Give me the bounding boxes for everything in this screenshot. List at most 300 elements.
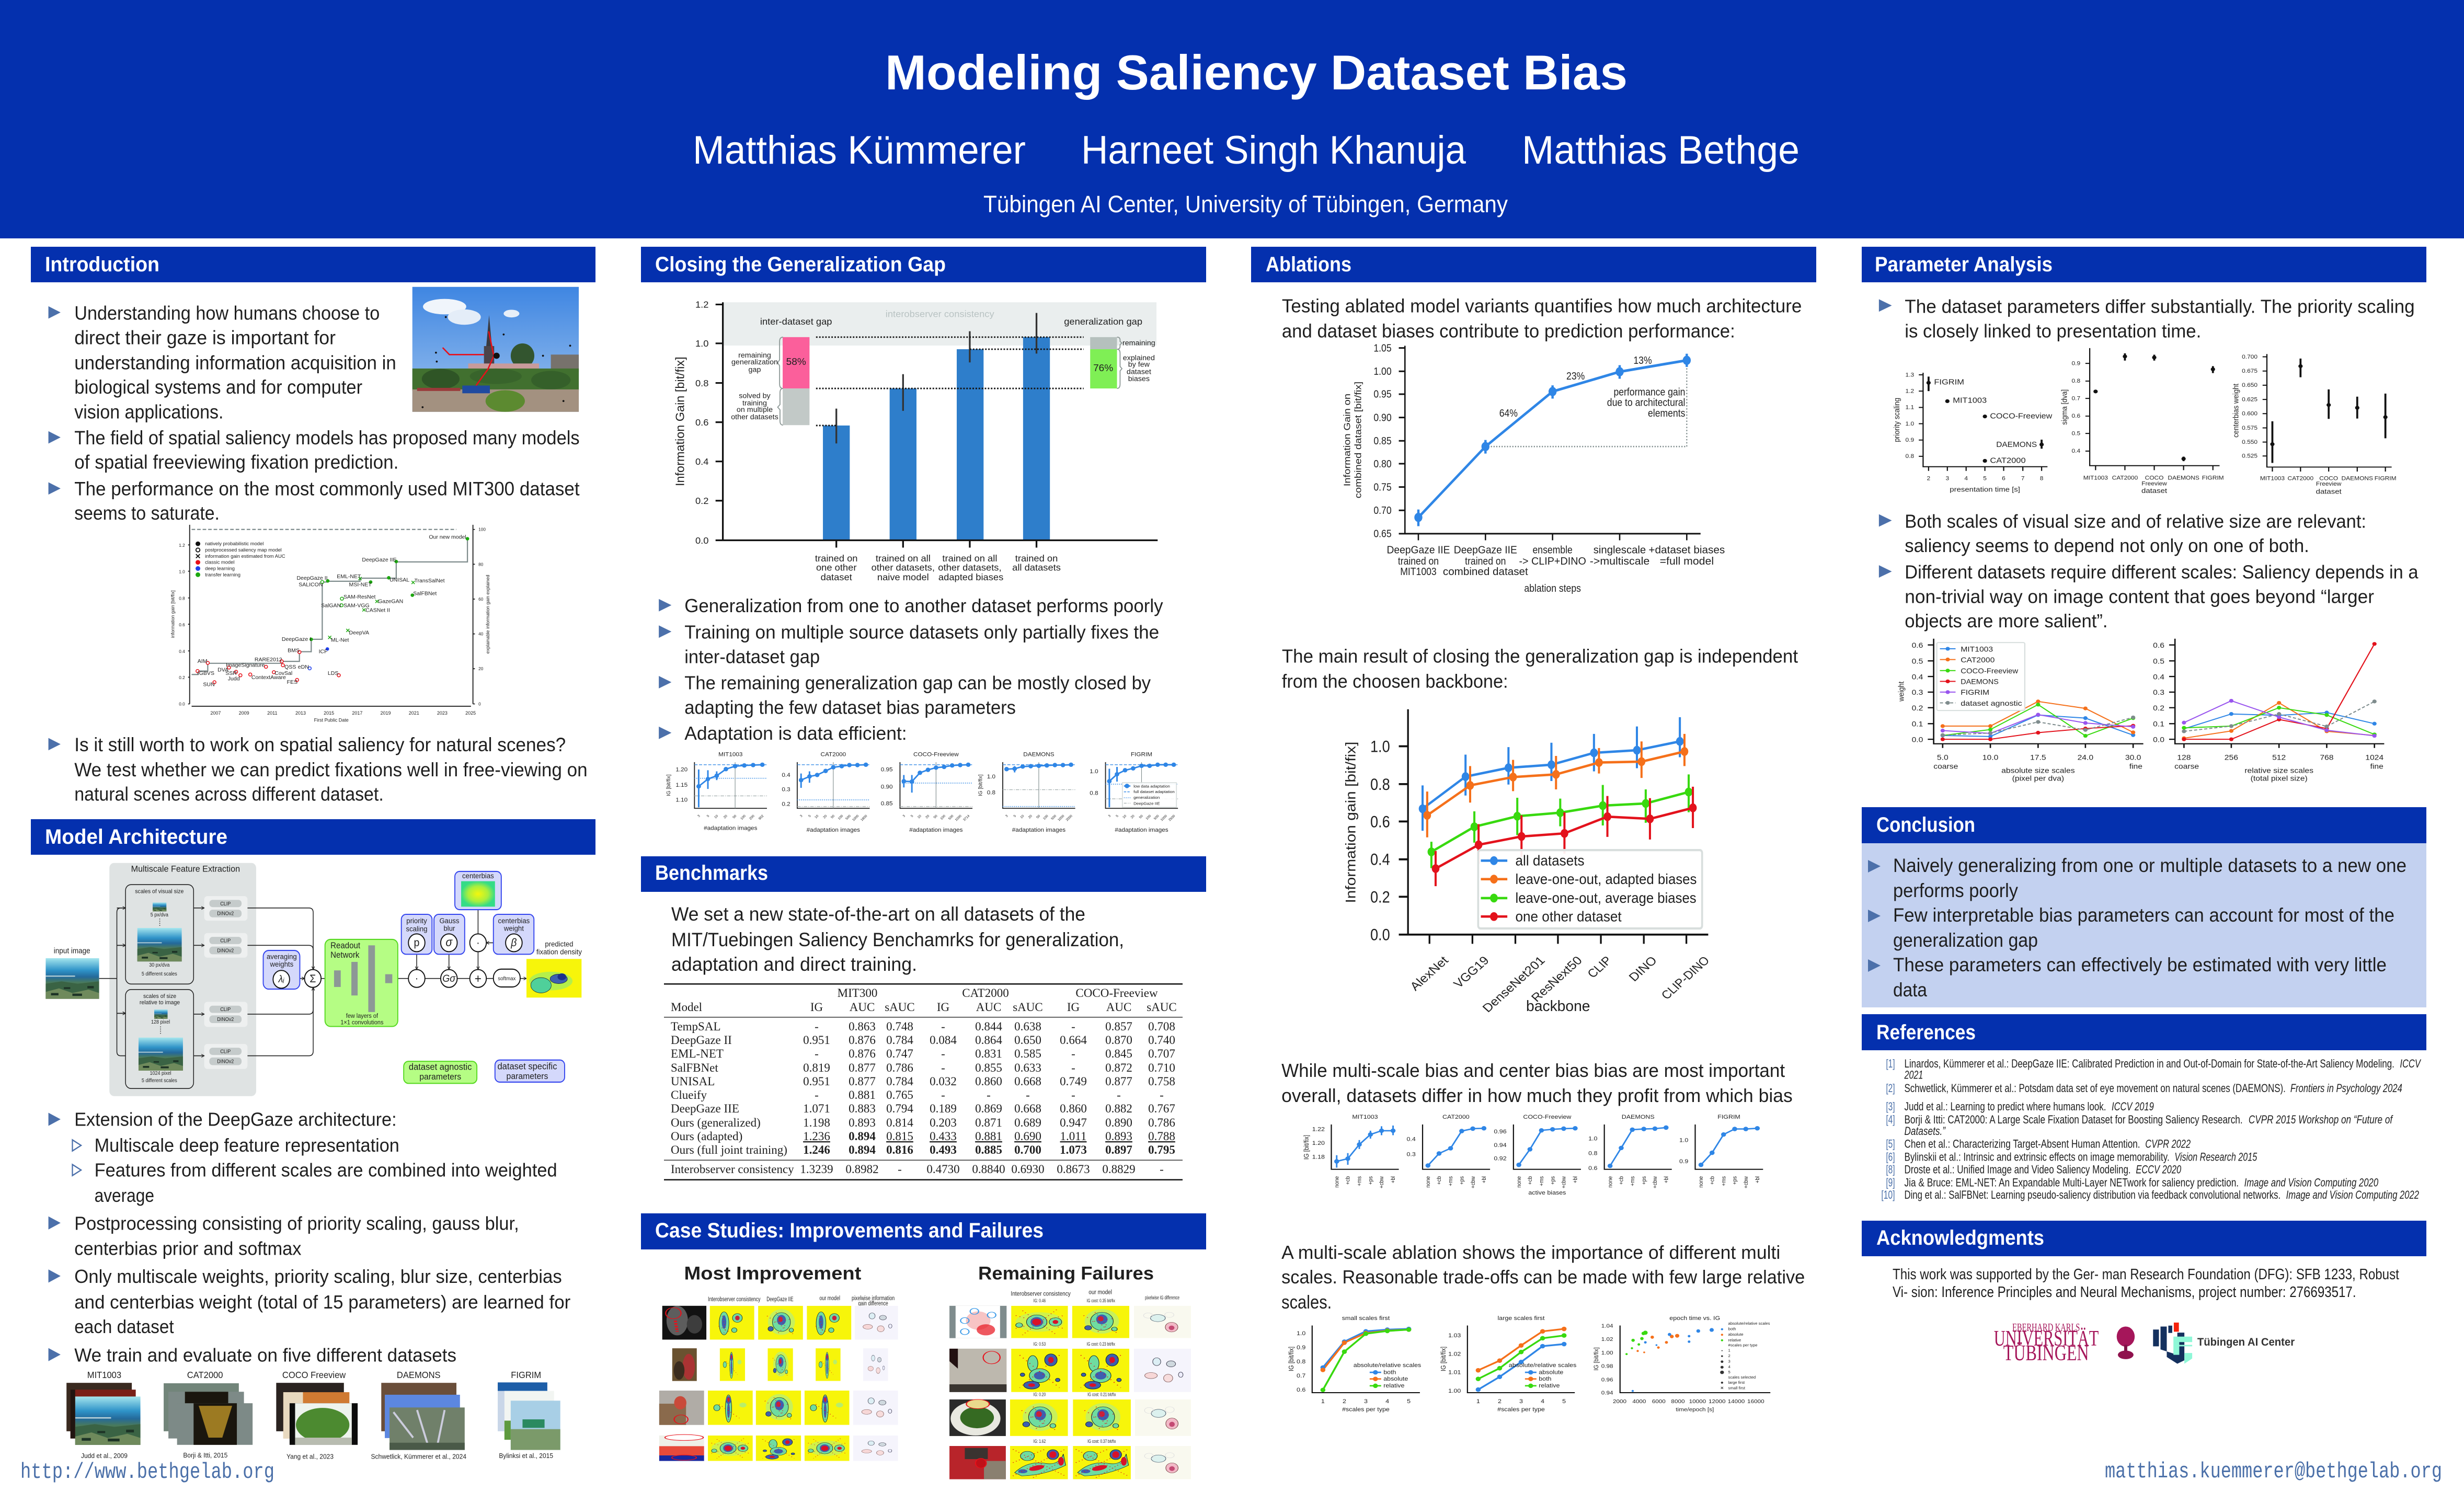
scatter chart: centerbias weight: dataset <box>2316 487 2342 495</box>
averaging weights: λᵢ <box>278 973 284 984</box>
mini chart: MIT1003 adaptation: 10 <box>714 814 719 819</box>
text: multi-scale ablation: scales. Reasonable trade-offs can be made with few large relative <box>1281 1267 1805 1288</box>
line chart: large scales first: 1.03 <box>1448 1332 1461 1339</box>
table: benchmark results: - <box>815 1047 819 1060</box>
table: benchmark results: 0.758 <box>1148 1075 1175 1088</box>
legend: datasets: FIGRIM <box>1961 689 1989 697</box>
mini charts: active biases: active biases <box>1528 1189 1566 1196</box>
mini chart: FIGRIM adaptation: 100 <box>1145 814 1152 821</box>
line chart: large scales first: 1.02 <box>1448 1350 1461 1357</box>
table: benchmark results: - <box>1160 1088 1164 1101</box>
line chart: ablation steps: Information Gain on <box>1343 394 1353 486</box>
table: benchmark results: 0.8673 <box>1057 1163 1090 1176</box>
scatter chart: epoch time vs IG: 0.98 <box>1601 1363 1613 1369</box>
mini chart: CAT2000 adaptation: 5 <box>808 814 812 818</box>
scatter chart: centerbias weight: 0.625 <box>2242 397 2257 403</box>
heading: Model Architecture <box>31 819 595 855</box>
table: benchmark results: UNISAL <box>671 1075 715 1088</box>
mini charts: active biases: +cbw <box>1561 1176 1567 1188</box>
chart: information gain over time: IGBVS <box>198 671 214 676</box>
mini chart: COCO-Freeview adaptation: 20 <box>925 814 931 819</box>
mini charts: active biases: +ps <box>1550 1176 1556 1185</box>
scatter chart: priority scaling: 1.1 <box>1906 405 1914 410</box>
panel: model architecture body <box>45 863 582 1461</box>
panel: multiscale feature extraction: relative to image <box>140 1000 180 1006</box>
bar chart: generalization gap: generalization <box>731 358 778 366</box>
table: benchmark results: 0.4730 <box>926 1163 960 1176</box>
chart: information gain over time: 2013 <box>295 710 306 716</box>
legend: datasets: MIT1003 <box>1961 646 1993 653</box>
bullet list: architecture: We train and evaluate on five different datasets <box>74 1345 456 1366</box>
mini chart: MIT1003 adaptation: 902 <box>758 814 765 821</box>
panel: multiscale feature extraction: CLIP <box>220 937 231 944</box>
table: benchmark results: - <box>1071 1047 1075 1060</box>
line chart: small scales first: 5 <box>1407 1397 1411 1405</box>
logo: University of Tübingen: TÜBINGEN <box>2003 1341 2089 1365</box>
scatter chart: priority scaling: FIGRIM <box>1934 378 1964 386</box>
table: benchmark results: 0.951 <box>803 1034 830 1047</box>
table: benchmark results: 0.871 <box>975 1116 1002 1129</box>
bullet list: architecture: Postprocessing consisting of priority scaling, gauss blur, <box>74 1213 519 1234</box>
legend: scatter: absolute <box>1728 1333 1744 1337</box>
mini chart: DAEMONS adaptation: 0.8 <box>987 790 995 796</box>
scatter chart: centerbias weight: 0.675 <box>2242 369 2257 374</box>
line chart: absolute size scale weights: weight <box>1897 681 1906 702</box>
chart: information gain over time: SalGAN <box>321 603 341 609</box>
scatter chart: priority scaling: 3 <box>1945 476 1949 481</box>
heading: Acknowledgments <box>1862 1221 2426 1256</box>
chart: information gain over time: 40 <box>478 632 484 637</box>
readout network: few layers of <box>346 1013 379 1019</box>
bar chart: generalization gap: 0.2 <box>695 496 709 506</box>
reference list: [1] <box>1886 1058 1895 1070</box>
scatter chart: epoch time vs IG <box>1593 1314 1770 1413</box>
centerbias weight <box>494 914 534 954</box>
text: multi-scale bias: While multi-scale bias and center bias bias are most important <box>1281 1060 1785 1082</box>
mini charts: active biases: 0.92 <box>1494 1155 1507 1162</box>
averaging weights <box>263 950 300 989</box>
legend: datasets: DAEMONS <box>1961 678 1999 686</box>
line chart: relative size scale weights: 0.5 <box>2153 658 2164 665</box>
table: benchmark results: 0.883 <box>849 1102 876 1115</box>
line chart: absolute size scale weights: absolute size scales <box>2001 767 2075 775</box>
table: benchmark results: DeepGaze IIE <box>671 1102 739 1115</box>
panel: parameter analysis <box>1879 296 2419 783</box>
mini chart: COCO-Freeview adaptation: COCO-Freeview <box>913 752 959 758</box>
line chart: ablation steps: 0.70 <box>1373 505 1392 517</box>
table: benchmark results: 0.664 <box>1060 1034 1087 1047</box>
scatter chart: centerbias weight: 0.700 <box>2242 354 2257 360</box>
mini charts: active biases: +ms <box>1539 1176 1545 1186</box>
panel: multiscale feature extraction <box>109 863 256 1096</box>
table: benchmark results: 0.893 <box>1105 1130 1132 1143</box>
panel: multiscale feature extraction: 1024 pixel <box>150 1070 171 1076</box>
mini chart: FIGRIM adaptation: 500 <box>1153 814 1160 821</box>
backbone axis labels <box>1407 954 1713 1015</box>
line chart: relative size scale weights: (total pixel size) <box>2251 775 2308 783</box>
mini charts: active biases: +cbw <box>1470 1176 1476 1188</box>
line chart: small scales first: absolute <box>1383 1375 1408 1382</box>
chart: information gain over time: UNISAL <box>389 578 409 583</box>
bullet list: generalization <box>659 595 1163 744</box>
mini chart: FIGRIM adaptation: 3 <box>1108 814 1112 818</box>
text: backbone independence <box>1282 646 1798 692</box>
mini chart: MIT1003 adaptation: 1.10 <box>675 797 687 804</box>
line chart: ablation steps: trained on <box>1465 556 1506 567</box>
legend: scatter: 4 <box>1728 1365 1730 1369</box>
line chart: ablation steps: 1.00 <box>1373 366 1392 377</box>
reference list: [10] <box>1881 1189 1895 1201</box>
mini charts: active biases: +cbw <box>1744 1176 1749 1188</box>
mini chart: MIT1003 adaptation: 1.20 <box>675 767 687 773</box>
mini chart: DAEMONS adaptation: 5 <box>1013 814 1017 818</box>
table: benchmark results: 0.700 <box>1014 1143 1041 1156</box>
table: benchmark results: 0.863 <box>849 1020 876 1033</box>
line chart: small scales first: absolute/relative scales <box>1354 1362 1421 1369</box>
panel: closing the generalization gap body <box>659 300 1178 833</box>
chart: information gain over time: ContextAware <box>251 675 286 681</box>
line chart: backbones: 0.4 <box>1370 851 1390 869</box>
heading: Closing the Generalization Gap <box>641 247 1206 282</box>
table: benchmark results: 0.747 <box>886 1047 913 1060</box>
mini chart: CAT2000 adaptation: 0.2 <box>782 801 790 807</box>
line chart: relative size scale weights: 0.2 <box>2153 705 2164 713</box>
table: benchmark results: 0.650 <box>1014 1034 1041 1047</box>
scatter chart: epoch time vs IG: 6000 <box>1652 1398 1666 1405</box>
scatter chart: priority scaling <box>1892 372 2053 493</box>
bullet list: introduction: vision applications. <box>74 401 223 422</box>
chart: information gain over time: DeepGaze IIE <box>362 557 397 563</box>
text: ablated variants: and dataset biases contribute to prediction performance: <box>1282 320 1735 342</box>
author 3: Matthias Bethge <box>1522 128 1800 173</box>
panel: conclusion <box>1862 843 2426 1007</box>
line chart: ablation steps: +dataset biases <box>1648 545 1725 556</box>
dataset: CAT2000: CAT2000 <box>187 1370 223 1380</box>
line chart: large scales first: large scales first <box>1498 1314 1545 1322</box>
gauss blur: blur <box>443 924 455 933</box>
table: benchmark results: sAUC <box>1147 1001 1177 1014</box>
line chart: ablation steps: 0.90 <box>1373 412 1392 424</box>
line chart: backbones: 1.0 <box>1370 738 1390 756</box>
chart: information gain over time: FES <box>287 680 297 685</box>
table: benchmark results: 0.788 <box>1148 1130 1175 1143</box>
table: benchmark results: 0.947 <box>1060 1116 1087 1129</box>
bar chart: generalization gap: inter-dataset gap <box>760 316 832 327</box>
table: benchmark results: 1.198 <box>803 1116 830 1129</box>
line chart: relative size scale weights: 768 <box>2320 754 2334 762</box>
scatter chart: priority scaling: CAT2000 <box>1990 456 2026 465</box>
scatter chart: centerbias weight: DAEMONS <box>2342 476 2373 481</box>
scatter chart: centerbias weight: 0.600 <box>2242 411 2257 417</box>
bullet list: introduction: We test whether we can predict fixations well in free-viewing on <box>74 759 588 781</box>
mini chart: DAEMONS adaptation: 10 <box>1019 814 1025 819</box>
scatter chart: sigma: FIGRIM <box>2202 475 2224 481</box>
backbone axis labels: AlexNet <box>1407 954 1451 993</box>
line chart: absolute size scale weights: fine <box>2129 763 2142 771</box>
mini chart: COCO-Freeview adaptation: 500 <box>948 814 955 821</box>
scatter chart: centerbias weight: COCO <box>2319 476 2338 481</box>
table: benchmark results: AUC <box>1106 1001 1131 1014</box>
scatter chart: priority scaling: 5 <box>1983 476 1987 481</box>
mini chart: MIT1003 adaptation: 50 <box>732 814 738 819</box>
table: benchmark results: Clueify <box>671 1088 707 1101</box>
bullet list: architecture: Features from different scales are combined into weighted <box>95 1160 557 1181</box>
heading: Conclusion: Conclusion <box>1876 813 1975 836</box>
legend: dataset agnostic: parameters <box>419 1072 461 1082</box>
sum node: Σ <box>310 973 316 985</box>
mini charts: active biases: none <box>1699 1176 1704 1188</box>
bar chart: generalization gap: 0.4 <box>695 456 709 467</box>
line chart: ablation steps: trained on <box>1398 556 1439 567</box>
legend: backbones: all datasets <box>1516 852 1585 869</box>
chart: information gain over time: 2007 <box>210 710 221 716</box>
scatter chart: epoch time vs IG: 1.00 <box>1601 1350 1613 1356</box>
table: benchmark results: 0.855 <box>975 1061 1002 1074</box>
chart: information gain over time: SUN <box>203 682 215 687</box>
line chart: large scales first <box>1439 1314 1576 1413</box>
centerbias: centerbias <box>462 871 494 880</box>
bullet list: introduction: direct their gaze is important for <box>74 327 336 348</box>
bullet list: generalization: Adaptation is data efficient: <box>684 722 907 744</box>
legend: datasets <box>1937 642 2025 710</box>
mini chart: CAT2000 adaptation: #adaptation images <box>807 827 860 833</box>
scatter chart: centerbias weight: CAT2000 <box>2288 476 2313 481</box>
line chart: small scales first: small scales first <box>1342 1314 1390 1322</box>
mini chart: MIT1003 adaptation: IG [bit/fix] <box>666 774 672 796</box>
dataset: CAT2000: Borji & Itti, 2015 <box>183 1452 227 1459</box>
text: multi-scale ablation: scales. <box>1281 1292 1332 1313</box>
bullet list: architecture: average <box>95 1185 154 1206</box>
chart: information gain over time: 1.0 <box>179 569 185 574</box>
line chart: small scales first: 1 <box>1321 1397 1325 1405</box>
heading: Conclusion <box>1862 807 2426 843</box>
priority scaling <box>402 914 432 954</box>
mini chart: CAT2000 adaptation: 500 <box>845 814 852 821</box>
mini charts: active biases: +cb <box>1345 1176 1351 1185</box>
author 2: Harneet Singh Khanuja <box>1081 128 1466 173</box>
chart: information gain over time: explainable information gain explained <box>485 575 490 653</box>
mini charts: active biases: +cb <box>1710 1176 1716 1185</box>
heading: Closing the Generalization Gap: Closing the Generalization Gap <box>655 253 946 276</box>
table: benchmark results: 1.071 <box>803 1102 830 1115</box>
table: benchmark results: COCO-Freeview <box>1075 986 1158 1000</box>
mini chart: FIGRIM adaptation: 20 <box>1130 814 1136 819</box>
bar chart: generalization gap: explained <box>1123 353 1155 362</box>
legend: scatter: 5 <box>1728 1370 1730 1374</box>
mini chart: MIT1003 adaptation: 20 <box>723 814 728 819</box>
mini chart: DAEMONS adaptation: 1.0 <box>987 774 995 780</box>
mini charts: active biases <box>1303 1113 1763 1196</box>
scatter chart: priority scaling: 8 <box>2040 476 2043 481</box>
line chart: large scales first: 3 <box>1519 1397 1523 1405</box>
chart: information gain over time: ImageSignature <box>226 663 265 668</box>
legend: adaptation <box>1122 783 1176 807</box>
table: benchmark results: IG <box>810 1001 823 1014</box>
chart: information gain over time: TransSalNet <box>414 578 445 584</box>
text: pixelwise IG difference <box>1145 1295 1179 1301</box>
panel: multiscale feature extraction: Multiscale Feature Extraction <box>131 865 240 874</box>
table: benchmark results: 0.749 <box>1060 1075 1087 1088</box>
bar chart: generalization gap: remaining <box>1122 339 1155 347</box>
line chart: absolute size scale weights: 0.5 <box>1912 658 1923 665</box>
line chart: small scales first: both <box>1383 1369 1396 1375</box>
legend: scatter: absolute/relative scales <box>1728 1322 1770 1326</box>
legend: adaptation: generalization <box>1133 795 1160 800</box>
mini charts: active biases: FIGRIM <box>1717 1113 1740 1120</box>
operator nodes: · <box>415 973 418 984</box>
table: benchmark results: - <box>1071 1020 1075 1033</box>
readout network: Network <box>330 950 360 960</box>
mini charts: active biases: +ps <box>1368 1176 1374 1185</box>
figure: most improvement examples: Interobserver consistency <box>708 1296 761 1303</box>
averaging weights: averaging <box>267 952 297 960</box>
reference list: [2] <box>1886 1082 1895 1095</box>
bar chart: generalization gap: 76% <box>1093 362 1113 373</box>
reference list: ICCV 2019 <box>2112 1100 2154 1113</box>
bar chart: generalization gap: trained on all <box>876 554 931 564</box>
predicted fixation density: fixation density <box>536 948 582 956</box>
bullet list: architecture: Extension of the DeepGaze architecture: <box>74 1109 397 1130</box>
line chart: large scales first: absolute <box>1539 1369 1564 1375</box>
bar chart: generalization gap: by few <box>1128 360 1150 369</box>
mini chart: DAEMONS adaptation: 2000 <box>1065 814 1073 822</box>
chart: information gain over time: SAM-ResNet <box>343 594 376 600</box>
heading: Model Architecture: Model Architecture <box>45 825 227 848</box>
line chart: backbones: 0.2 <box>1370 889 1390 906</box>
table: benchmark results: 0.8840 <box>972 1163 1005 1176</box>
line chart: large scales first: relative <box>1539 1382 1560 1389</box>
scatter chart: epoch time vs IG: 2000 <box>1613 1398 1626 1405</box>
bullet list: introduction: seems to saturate. <box>74 502 220 524</box>
text: backbone independence: The main result of closing the generalization gap is independent <box>1282 646 1798 667</box>
heading: Ablations: Ablations <box>1266 253 1351 276</box>
table: benchmark results: AUC <box>976 1001 1001 1014</box>
legend: dataset agnostic: dataset agnostic <box>409 1061 472 1072</box>
table: benchmark results: 0.765 <box>886 1088 913 1101</box>
scatter chart: epoch time vs IG: 0.94 <box>1601 1390 1613 1396</box>
mini chart: COCO-Freeview adaptation: 3 <box>902 814 906 818</box>
mini chart: CAT2000 adaptation: 1800 <box>860 814 868 822</box>
panel: conclusion: Naively generalizing from one or multiple datasets to a new one <box>1893 855 2406 876</box>
scatter chart: sigma: dataset <box>2141 487 2167 495</box>
mini chart: COCO-Freeview adaptation: 50 <box>933 814 938 819</box>
table: benchmark results: 0.633 <box>1014 1061 1041 1074</box>
line chart: ablation steps: 1.05 <box>1373 342 1392 354</box>
line chart: absolute size scale weights: (pixel per dva) <box>2012 775 2064 783</box>
bullet list: introduction: understanding information acquisition in <box>74 352 396 373</box>
mini charts: active biases: 0.6 <box>1588 1165 1598 1172</box>
scatter chart: centerbias weight: Freeview <box>2316 481 2342 487</box>
mini charts: active biases: +ms <box>1357 1176 1363 1186</box>
dataset: DAEMONS: DAEMONS <box>397 1370 441 1380</box>
scatter chart: sigma <box>2060 348 2224 495</box>
text: ablated variants: Testing ablated model variants quantifies how much architecture <box>1282 295 1802 317</box>
table: benchmark results: 0.845 <box>1105 1047 1132 1060</box>
line chart: large scales first: 1.01 <box>1448 1369 1461 1375</box>
line chart: ablation steps: 13% <box>1633 355 1652 366</box>
table: benchmark results: 0.816 <box>886 1143 913 1156</box>
bar chart: generalization gap: gap <box>749 365 761 373</box>
scatter chart: epoch time vs IG: time/epoch [s] <box>1676 1407 1714 1413</box>
priority scaling: p <box>414 937 419 949</box>
bullet list: introduction: The performance on the most commonly used MIT300 dataset <box>74 478 580 500</box>
figure: remaining failures examples <box>949 1289 1191 1479</box>
legend: scatter: both <box>1728 1327 1736 1332</box>
line chart: small scales first: 4 <box>1385 1397 1389 1405</box>
line chart: small scales first: relative <box>1383 1382 1405 1389</box>
line chart: absolute size scale weights <box>1897 639 2144 783</box>
backbone axis labels: VGG19 <box>1451 954 1492 991</box>
chart: information gain over time: 2015 <box>324 710 334 716</box>
scatter chart: epoch time vs IG: 1.04 <box>1601 1323 1613 1329</box>
line chart: ablation steps: 64% <box>1499 408 1518 419</box>
table: benchmark results: 1.236 <box>803 1130 830 1143</box>
mini chart: DAEMONS adaptation <box>978 752 1075 833</box>
table: benchmark results: - <box>1160 1163 1164 1176</box>
line chart: small scales first: 1.0 <box>1297 1330 1306 1337</box>
figure: remaining failures examples: Interobserver consistency <box>1011 1290 1071 1297</box>
mini charts: active biases: +bl <box>1755 1176 1761 1183</box>
line chart: absolute size scale weights: 0.6 <box>1912 642 1923 650</box>
mini charts: active biases: +ms <box>1630 1176 1636 1186</box>
mini chart: COCO-Freeview adaptation: 100 <box>939 814 946 821</box>
table: benchmark results: - <box>941 1020 945 1033</box>
sub-heading: Most Improvement: Most Improvement <box>684 1263 861 1283</box>
table: benchmark results: 0.882 <box>1105 1102 1132 1115</box>
table: benchmark results: 0.786 <box>886 1061 913 1074</box>
gauss blur <box>434 914 465 954</box>
table: benchmark results: 0.032 <box>930 1075 957 1088</box>
mini chart: CAT2000 adaptation: 10 <box>814 814 820 819</box>
table: benchmark results: 0.815 <box>886 1130 913 1143</box>
mini charts: active biases: +ps <box>1641 1176 1647 1185</box>
line chart: ablation steps <box>1343 342 1725 594</box>
mini charts: active biases: COCO-Freeview <box>1523 1113 1572 1120</box>
line chart: relative size scale weights: 0.3 <box>2153 689 2164 697</box>
scatter chart: epoch time vs IG: epoch time vs. IG <box>1669 1314 1720 1322</box>
table: benchmark results: 1.246 <box>803 1143 830 1156</box>
line chart: small scales first: #scales per type <box>1342 1406 1390 1413</box>
operator nodes: Gσ <box>442 973 456 984</box>
input image: input image <box>54 946 90 955</box>
table: benchmark results: 0.189 <box>930 1102 957 1115</box>
priority scaling: scaling <box>406 925 427 933</box>
panel: multiscale feature extraction: scales of size <box>143 993 176 1000</box>
legend: adaptation: DeepGaze IIE <box>1133 801 1160 806</box>
legend: scatter: 3 <box>1728 1359 1730 1364</box>
table: benchmark results: 0.877 <box>849 1075 876 1088</box>
line chart: backbones: 0.0 <box>1370 926 1390 944</box>
scatter chart: priority scaling: 4 <box>1964 476 1968 481</box>
table: benchmark results: IG <box>1067 1001 1080 1014</box>
bullet list: architecture <box>49 1109 571 1366</box>
mini charts: active biases: 0.96 <box>1494 1128 1507 1135</box>
dataset: CAT2000 <box>164 1370 253 1459</box>
mini chart: DAEMONS adaptation: 3 <box>1005 814 1009 818</box>
scatter chart: priority scaling: MIT1003 <box>1953 397 1987 405</box>
line chart: ablation steps: 0.65 <box>1373 529 1392 540</box>
line chart: absolute size scale weights: 5.0 <box>1937 754 1949 762</box>
line chart: large scales first: absolute/relative scales <box>1509 1362 1576 1369</box>
backbone axis labels: ResNext50 <box>1529 954 1585 1005</box>
mini charts: active biases: +ps <box>1459 1176 1465 1185</box>
panel: multiscale feature extraction: CLIP <box>220 1048 231 1054</box>
table: benchmark results: 0.786 <box>1148 1116 1175 1129</box>
mini chart: FIGRIM adaptation: 50 <box>1139 814 1144 819</box>
chart: information gain over time <box>170 525 490 723</box>
averaging weights: weights <box>270 960 293 968</box>
bullet list: architecture: centerbias prior and softmax <box>74 1238 302 1259</box>
